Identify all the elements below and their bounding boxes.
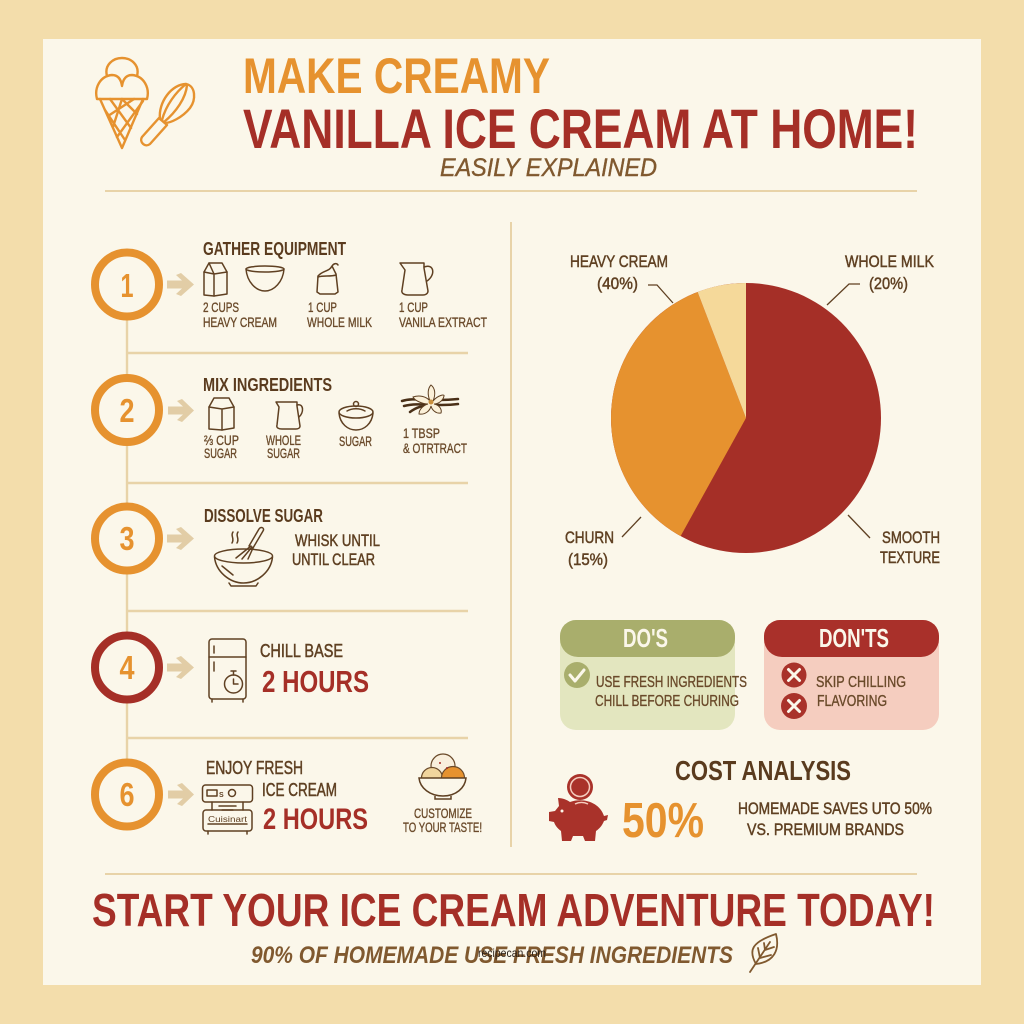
icon: check — [564, 662, 590, 688]
icon: cross 2 — [781, 693, 807, 719]
arrow — [167, 527, 194, 550]
cost description: HOMEMADE SAVES UTO 50% — [738, 799, 932, 818]
don'ts header — [764, 620, 939, 657]
pie label: smooth texture: SMOOTH — [882, 528, 940, 547]
icon: ice cream cone — [96, 58, 148, 148]
icon: whisk — [141, 84, 194, 145]
pie label: whole milk — [827, 252, 935, 305]
do's header: DO'S — [623, 623, 668, 653]
step 6: enjoy fresh ice cream — [95, 754, 482, 836]
step 2 number badge — [95, 378, 159, 442]
ingredient labels: 1 TBSP — [403, 425, 440, 441]
arrow — [167, 656, 194, 679]
step 1 heading: GATHER EQUIPMENT — [203, 239, 346, 259]
step 3 number badge — [95, 506, 159, 570]
icon: jug — [400, 263, 433, 295]
cost percentage: 50% — [622, 794, 704, 848]
ingredient labels: 1 CUP — [399, 299, 428, 315]
icon: milk carton — [204, 263, 227, 296]
pie label: churn: (15%) — [568, 550, 608, 569]
ingredient labels — [203, 299, 487, 330]
ingredient labels: 2 CUPS — [203, 299, 239, 315]
step 6 heading: ENJOY FRESH — [206, 758, 303, 778]
panel: don'ts — [764, 620, 939, 730]
icon: sugar bag — [317, 264, 338, 294]
step 4 duration: 2 HOURS — [262, 664, 369, 699]
step 3: dissolve sugar — [95, 506, 380, 586]
do's text: CHILL BEFORE CHURING — [595, 693, 739, 710]
pie label: smooth texture — [848, 515, 940, 567]
step 1 number badge: 1 — [120, 267, 134, 304]
do's text: USE FRESH INGREDIENTS — [596, 674, 747, 691]
ingredient labels: WHOLE MILK — [307, 314, 372, 330]
step 6 number badge: 6 — [120, 776, 134, 813]
step 6 duration: 2 HOURS — [263, 803, 368, 836]
step 4 number badge — [95, 636, 159, 700]
icon: vanilla flower — [402, 385, 458, 414]
ingredient labels: & OTRTRACT — [403, 440, 467, 456]
ingredient labels: SUGAR — [339, 433, 372, 449]
step 1: gather equipment — [95, 239, 487, 330]
cost description — [738, 799, 932, 839]
icon: milk carton — [209, 398, 234, 430]
do's header — [560, 620, 735, 657]
step 3 instruction: WHISK UNTIL — [295, 531, 380, 550]
step 4 label: CHILL BASE — [260, 641, 343, 661]
pie label: whole milk: WHOLE MILK — [845, 252, 935, 271]
subtitle: EASILY EXPLAINED — [440, 154, 657, 182]
don'ts header: DON'TS — [819, 623, 889, 653]
icon: ice cream machine: S — [219, 792, 224, 799]
timeline connectors — [127, 320, 468, 760]
step 3 heading: DISSOLVE SUGAR — [204, 506, 323, 526]
icon: sugar bowl — [339, 402, 373, 430]
icon: ice cream machine — [202, 785, 252, 834]
step 4 number badge: 4 — [120, 649, 135, 686]
do's text — [595, 674, 747, 710]
arrow — [167, 273, 194, 296]
icon: bowl — [246, 266, 284, 291]
pie label: heavy cream: (40%) — [597, 274, 638, 293]
title line 1: MAKE CREAMY — [243, 48, 550, 104]
customize caption: TO YOUR TASTE! — [403, 820, 482, 835]
step 2: mix ingredients — [95, 375, 467, 461]
step 2 number badge: 2 — [120, 392, 134, 429]
ingredient labels: 1 CUP — [308, 299, 337, 315]
pie label: churn — [565, 517, 641, 569]
icon: cross 1 — [782, 662, 806, 688]
icon: bowl of ice cream scoops — [419, 754, 466, 799]
pie label: smooth texture: TEXTURE — [880, 548, 940, 567]
icon: leaf — [750, 934, 777, 972]
watermark: recipecan.com — [478, 946, 546, 960]
ingredient labels: VANILA EXTRACT — [399, 314, 487, 330]
step 6 label: ICE CREAM — [262, 780, 337, 800]
pie label: heavy cream — [570, 252, 673, 303]
icon: piggy bank — [549, 774, 608, 841]
icon: jug — [276, 402, 303, 429]
step 4: chill base — [95, 636, 369, 702]
don'ts text — [816, 674, 906, 710]
ingredient labels: HEAVY CREAM — [203, 314, 277, 330]
icon: ice cream machine: Cuisinart — [208, 815, 248, 824]
icon: whisking bowl — [214, 528, 272, 586]
step 3 number badge: 3 — [120, 520, 134, 557]
pie label: churn: CHURN — [565, 528, 614, 547]
ingredient labels: WHOLE — [266, 432, 301, 448]
step 6 number badge — [95, 762, 159, 826]
don'ts text: FLAVORING — [817, 693, 887, 710]
panel: do's — [560, 620, 747, 730]
pie label: whole milk: (20%) — [869, 274, 908, 293]
customize caption — [403, 806, 482, 835]
icon: fridge with timer — [209, 639, 246, 702]
cost analysis heading: COST ANALYSIS — [675, 755, 851, 786]
ingredient labels: SUGAR — [267, 445, 300, 461]
step 2 heading: MIX INGREDIENTS — [203, 375, 332, 395]
ingredient labels: ⅔ CUP — [204, 432, 239, 448]
arrow — [168, 399, 194, 422]
step 1 number badge — [95, 252, 159, 316]
step 3 instruction: UNTIL CLEAR — [292, 550, 375, 569]
arrow — [168, 783, 194, 806]
ingredient labels — [204, 425, 467, 461]
footer statistic: 90% OF HOMEMADE USE FRESH INGREDIENTS — [251, 942, 733, 969]
step 3 instruction — [292, 531, 380, 569]
don'ts text: SKIP CHILLING — [816, 674, 906, 691]
ingredient labels: SUGAR — [204, 445, 237, 461]
pie chart — [611, 283, 881, 553]
pie label: heavy cream: HEAVY CREAM — [570, 252, 668, 271]
customize caption: CUSTOMIZE — [414, 806, 472, 821]
cost description: VS. PREMIUM BRANDS — [747, 820, 904, 839]
